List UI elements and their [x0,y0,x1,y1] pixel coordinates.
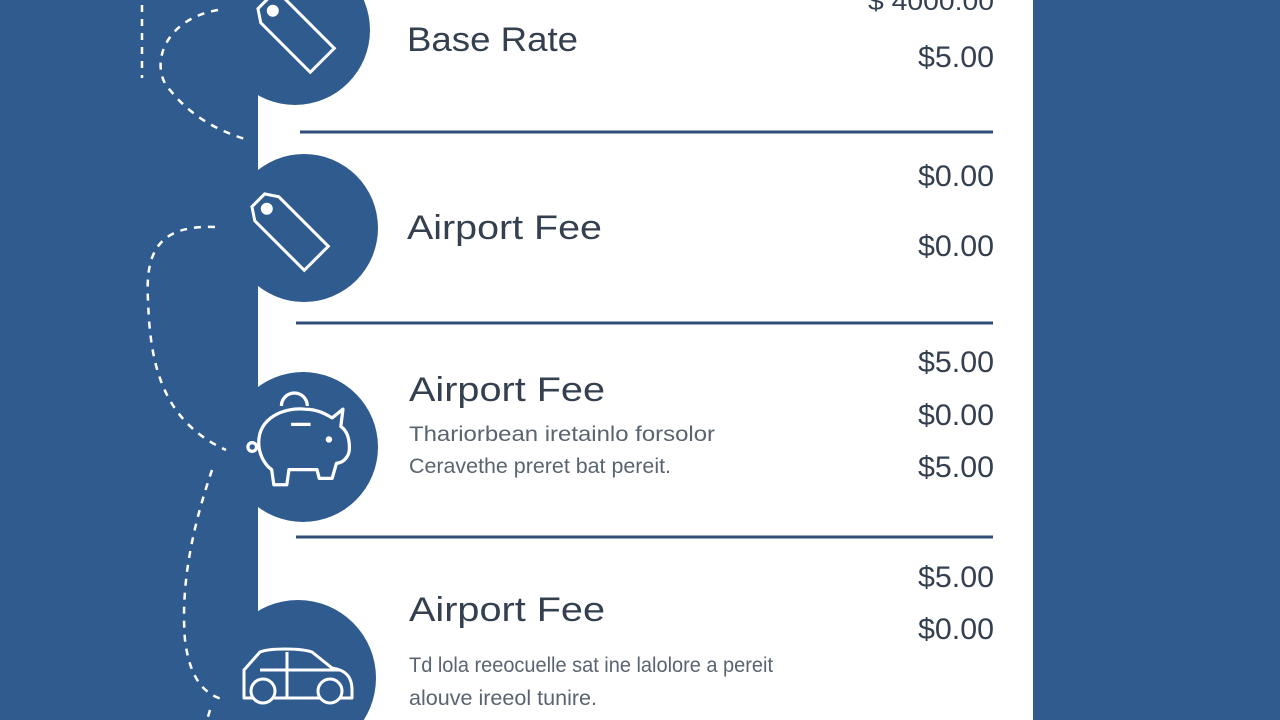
panel: white fee list [258,0,1033,720]
row 4: Airport Fee with description: Td lola reeocuelle sat ine lalolore a pereit [409,654,773,677]
row 3: Airport Fee with description: $0.00 [918,399,994,432]
dividers [296,132,993,537]
row 1: Base Rate: $5.00 [918,41,994,74]
row 3: Airport Fee with description: Airport Fee [409,371,605,409]
row 2: Airport Fee: $0.00 [918,230,994,263]
circle 1 with tag icon [220,0,370,105]
row 1: Base Rate: Base Rate [407,21,578,59]
dashed path [142,5,248,720]
row 2: Airport Fee: Airport Fee [407,209,602,247]
row 4: Airport Fee with description: $0.00 [918,613,994,646]
row 4: Airport Fee with description: Airport Fee [409,591,605,629]
circle 3 with piggy bank icon [228,372,378,522]
row 2: Airport Fee [407,160,994,263]
row 4: Airport Fee with description: alouve ireeol tunire. [409,687,597,710]
circle 2 with tag icon [230,154,378,302]
row 3: Airport Fee with description: Thariorbean iretainlo forsolor [409,423,715,446]
row 4: Airport Fee with description [409,561,994,710]
row 3: Airport Fee with description: $5.00 [918,451,994,484]
row 1: Base Rate [407,0,994,74]
row 3: Airport Fee with description: Ceravethe preret bat pereit. [409,455,671,478]
row 2: Airport Fee: $0.00 [918,160,994,193]
circle 4 with car icon [220,600,376,720]
row 3: Airport Fee with description [409,346,994,484]
row 4: Airport Fee with description: $5.00 [918,561,994,594]
row 3: Airport Fee with description: $5.00 [918,346,994,379]
